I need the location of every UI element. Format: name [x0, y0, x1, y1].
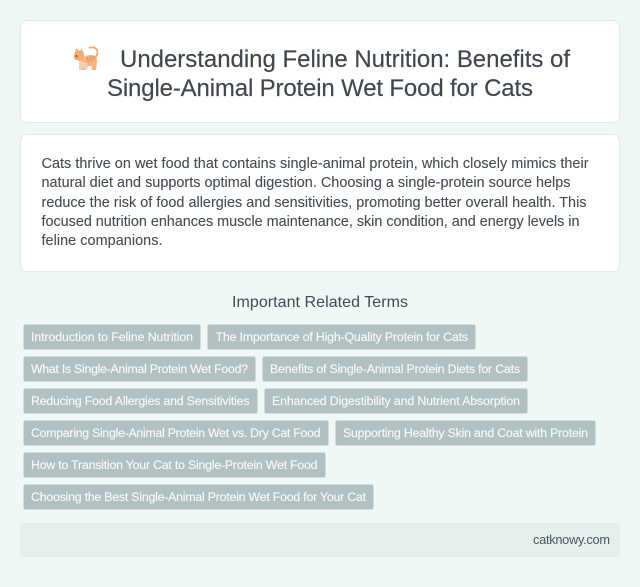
tag [24, 356, 256, 382]
tag: How to Transition Your Cat to Single-Protein Wet Food [31, 458, 318, 472]
tag: The Importance of High-Quality Protein for Cats [216, 330, 468, 344]
tag list [24, 324, 596, 510]
icon: cat [74, 48, 97, 70]
tag [24, 420, 328, 446]
tag [264, 388, 528, 414]
tag: Benefits of Single-Animal Protein Diets for Cats [270, 362, 520, 376]
text block: summary paragraph: focused nutrition enhances muscle maintenance, skin condition, and energy levels in [42, 214, 580, 230]
title [107, 46, 570, 102]
tag: Choosing the Best Single-Animal Protein Wet Food for Your Cat [31, 490, 367, 504]
tag [24, 388, 258, 414]
tag: Comparing Single-Animal Protein Wet vs. Dry Cat Food [31, 426, 321, 440]
text block: summary paragraph: Cats thrive on wet food that contains single-animal protein, which closely mimics their [42, 156, 589, 172]
panel: title card [20, 20, 620, 122]
title: Understanding Feline Nutrition: Benefits of [120, 46, 570, 73]
footer: catknowy.com [533, 532, 610, 547]
tag: Introduction to Feline Nutrition [31, 330, 193, 344]
heading: related terms: Important Related Terms [232, 294, 408, 311]
text block: summary paragraph: natural diet and supports optimal digestion. Choosing a single-protein source helps [42, 175, 570, 191]
tag [262, 356, 528, 382]
text block: summary paragraph: feline companions. [42, 233, 162, 249]
text block: summary paragraph: reduce the risk of food allergies and sensitivities, promoting better overall health. This [42, 195, 586, 211]
tag [336, 420, 596, 446]
panel: summary [20, 134, 620, 272]
tag: Enhanced Digestibility and Nutrient Absorption [272, 394, 520, 408]
tag [24, 484, 374, 510]
tag: Reducing Food Allergies and Sensitivities [31, 394, 250, 408]
tag [24, 324, 200, 350]
tag: What Is Single-Animal Protein Wet Food? [31, 362, 248, 376]
title: Single-Animal Protein Wet Food for Cats [107, 75, 533, 102]
tag [24, 452, 326, 478]
tag [208, 324, 476, 350]
tag: Supporting Healthy Skin and Coat with Protein [343, 426, 588, 440]
footer [20, 523, 620, 557]
text block: summary paragraph [42, 156, 589, 249]
